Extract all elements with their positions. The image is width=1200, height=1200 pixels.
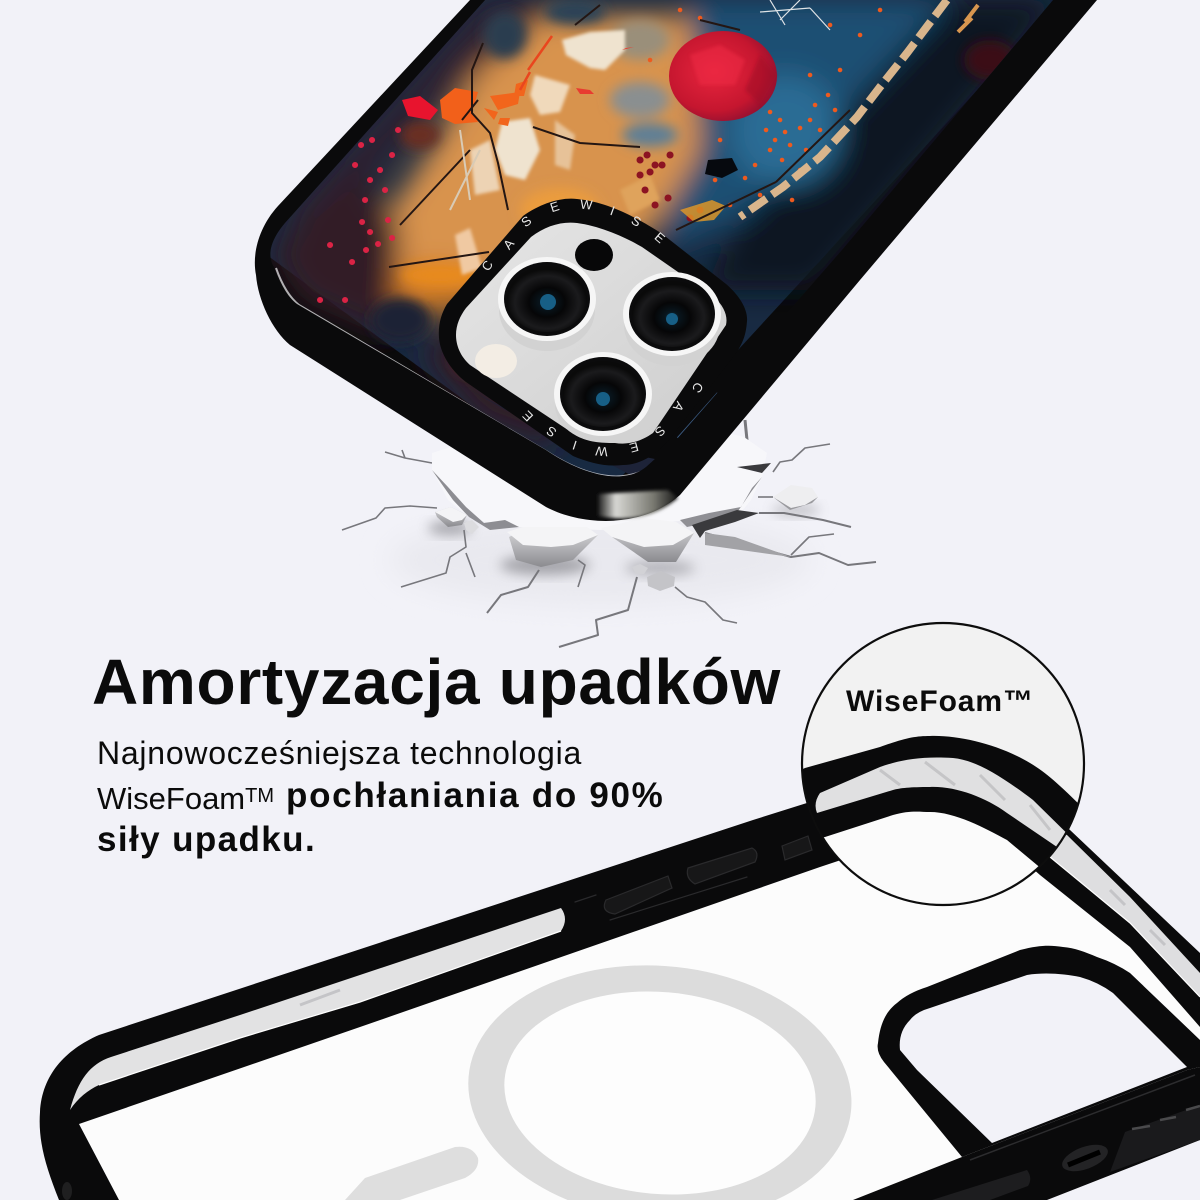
magnetic ring xyxy=(468,965,851,1200)
body line 1: Najnowocześniejsza technologia xyxy=(97,735,582,771)
branches xyxy=(389,5,850,267)
island lettering: S xyxy=(543,423,559,440)
heading: Amortyzacja upadków xyxy=(92,646,781,718)
island lettering: W xyxy=(580,197,594,213)
crack lines xyxy=(342,420,876,647)
dark red zone xyxy=(964,40,1016,80)
island lettering: S xyxy=(518,213,535,230)
island lettering: C xyxy=(689,379,707,396)
small rocks xyxy=(435,485,818,591)
island lettering: W xyxy=(594,443,608,459)
dark red berries xyxy=(640,155,700,218)
island lettering: I xyxy=(571,438,579,453)
ground shading xyxy=(390,504,820,605)
case shell xyxy=(255,0,1097,521)
island lettering: E xyxy=(628,439,640,456)
magnified zoom circle xyxy=(800,622,1086,906)
foam hairlines xyxy=(99,857,1200,1085)
centre rock left xyxy=(507,527,598,567)
phone with black case xyxy=(255,0,1097,521)
camera cut-out frame xyxy=(878,946,1200,1157)
left foam gap xyxy=(70,908,565,1110)
right plate edge xyxy=(680,477,762,527)
island lettering: E xyxy=(519,408,536,425)
microphone xyxy=(575,239,613,271)
left plate edge xyxy=(432,470,519,530)
broken plates xyxy=(432,400,767,530)
island lettering: A xyxy=(500,236,517,252)
case back panel xyxy=(79,840,1200,1200)
lens bottom xyxy=(554,352,652,442)
cream paint dabs xyxy=(455,30,660,275)
body line 3 bold: siły upadku. xyxy=(97,820,316,859)
body line 2 regular: WiseFoamTM xyxy=(97,781,274,816)
lower band details xyxy=(932,1075,1200,1200)
lower wedge xyxy=(705,533,791,557)
alignment pill xyxy=(345,1147,478,1200)
tan brush strokes xyxy=(740,0,947,217)
foliage splatter xyxy=(402,36,634,126)
lens right xyxy=(623,272,721,366)
island lettering: S xyxy=(652,423,669,440)
island inner silver xyxy=(456,223,726,444)
flash xyxy=(475,344,517,378)
strip below island xyxy=(478,394,655,475)
camera island xyxy=(439,197,747,466)
right foam gap xyxy=(1040,825,1200,997)
printed artwork xyxy=(260,0,1060,500)
case gloss xyxy=(598,490,678,518)
lower edge hole xyxy=(62,1182,72,1200)
dark wedges xyxy=(692,463,771,538)
side buttons xyxy=(575,836,812,920)
body line 2 bold: pochłaniania do 90% xyxy=(286,776,664,815)
body text xyxy=(97,735,664,859)
island lettering: S xyxy=(629,212,644,230)
case frame xyxy=(40,770,1200,1200)
camera cut-out opening xyxy=(900,974,1187,1143)
island lettering: E xyxy=(652,229,668,246)
red ornament xyxy=(669,31,777,121)
island lettering: C xyxy=(478,258,496,274)
centre rock right xyxy=(601,518,694,562)
foam streaks xyxy=(300,890,1165,1005)
cracked ground xyxy=(342,400,876,647)
berries xyxy=(320,130,398,300)
island lettering: I xyxy=(608,203,617,218)
lens top left xyxy=(498,257,596,351)
island lettering xyxy=(478,197,707,459)
WiseFoam label: WiseFoam™ xyxy=(846,685,1034,718)
orange specks xyxy=(650,10,880,205)
clear case xyxy=(40,770,1200,1200)
island lettering: E xyxy=(548,198,561,215)
circle outline xyxy=(802,623,1084,905)
island lettering: A xyxy=(670,399,687,415)
magnified content xyxy=(803,736,1078,870)
glossy rim line xyxy=(276,268,640,476)
